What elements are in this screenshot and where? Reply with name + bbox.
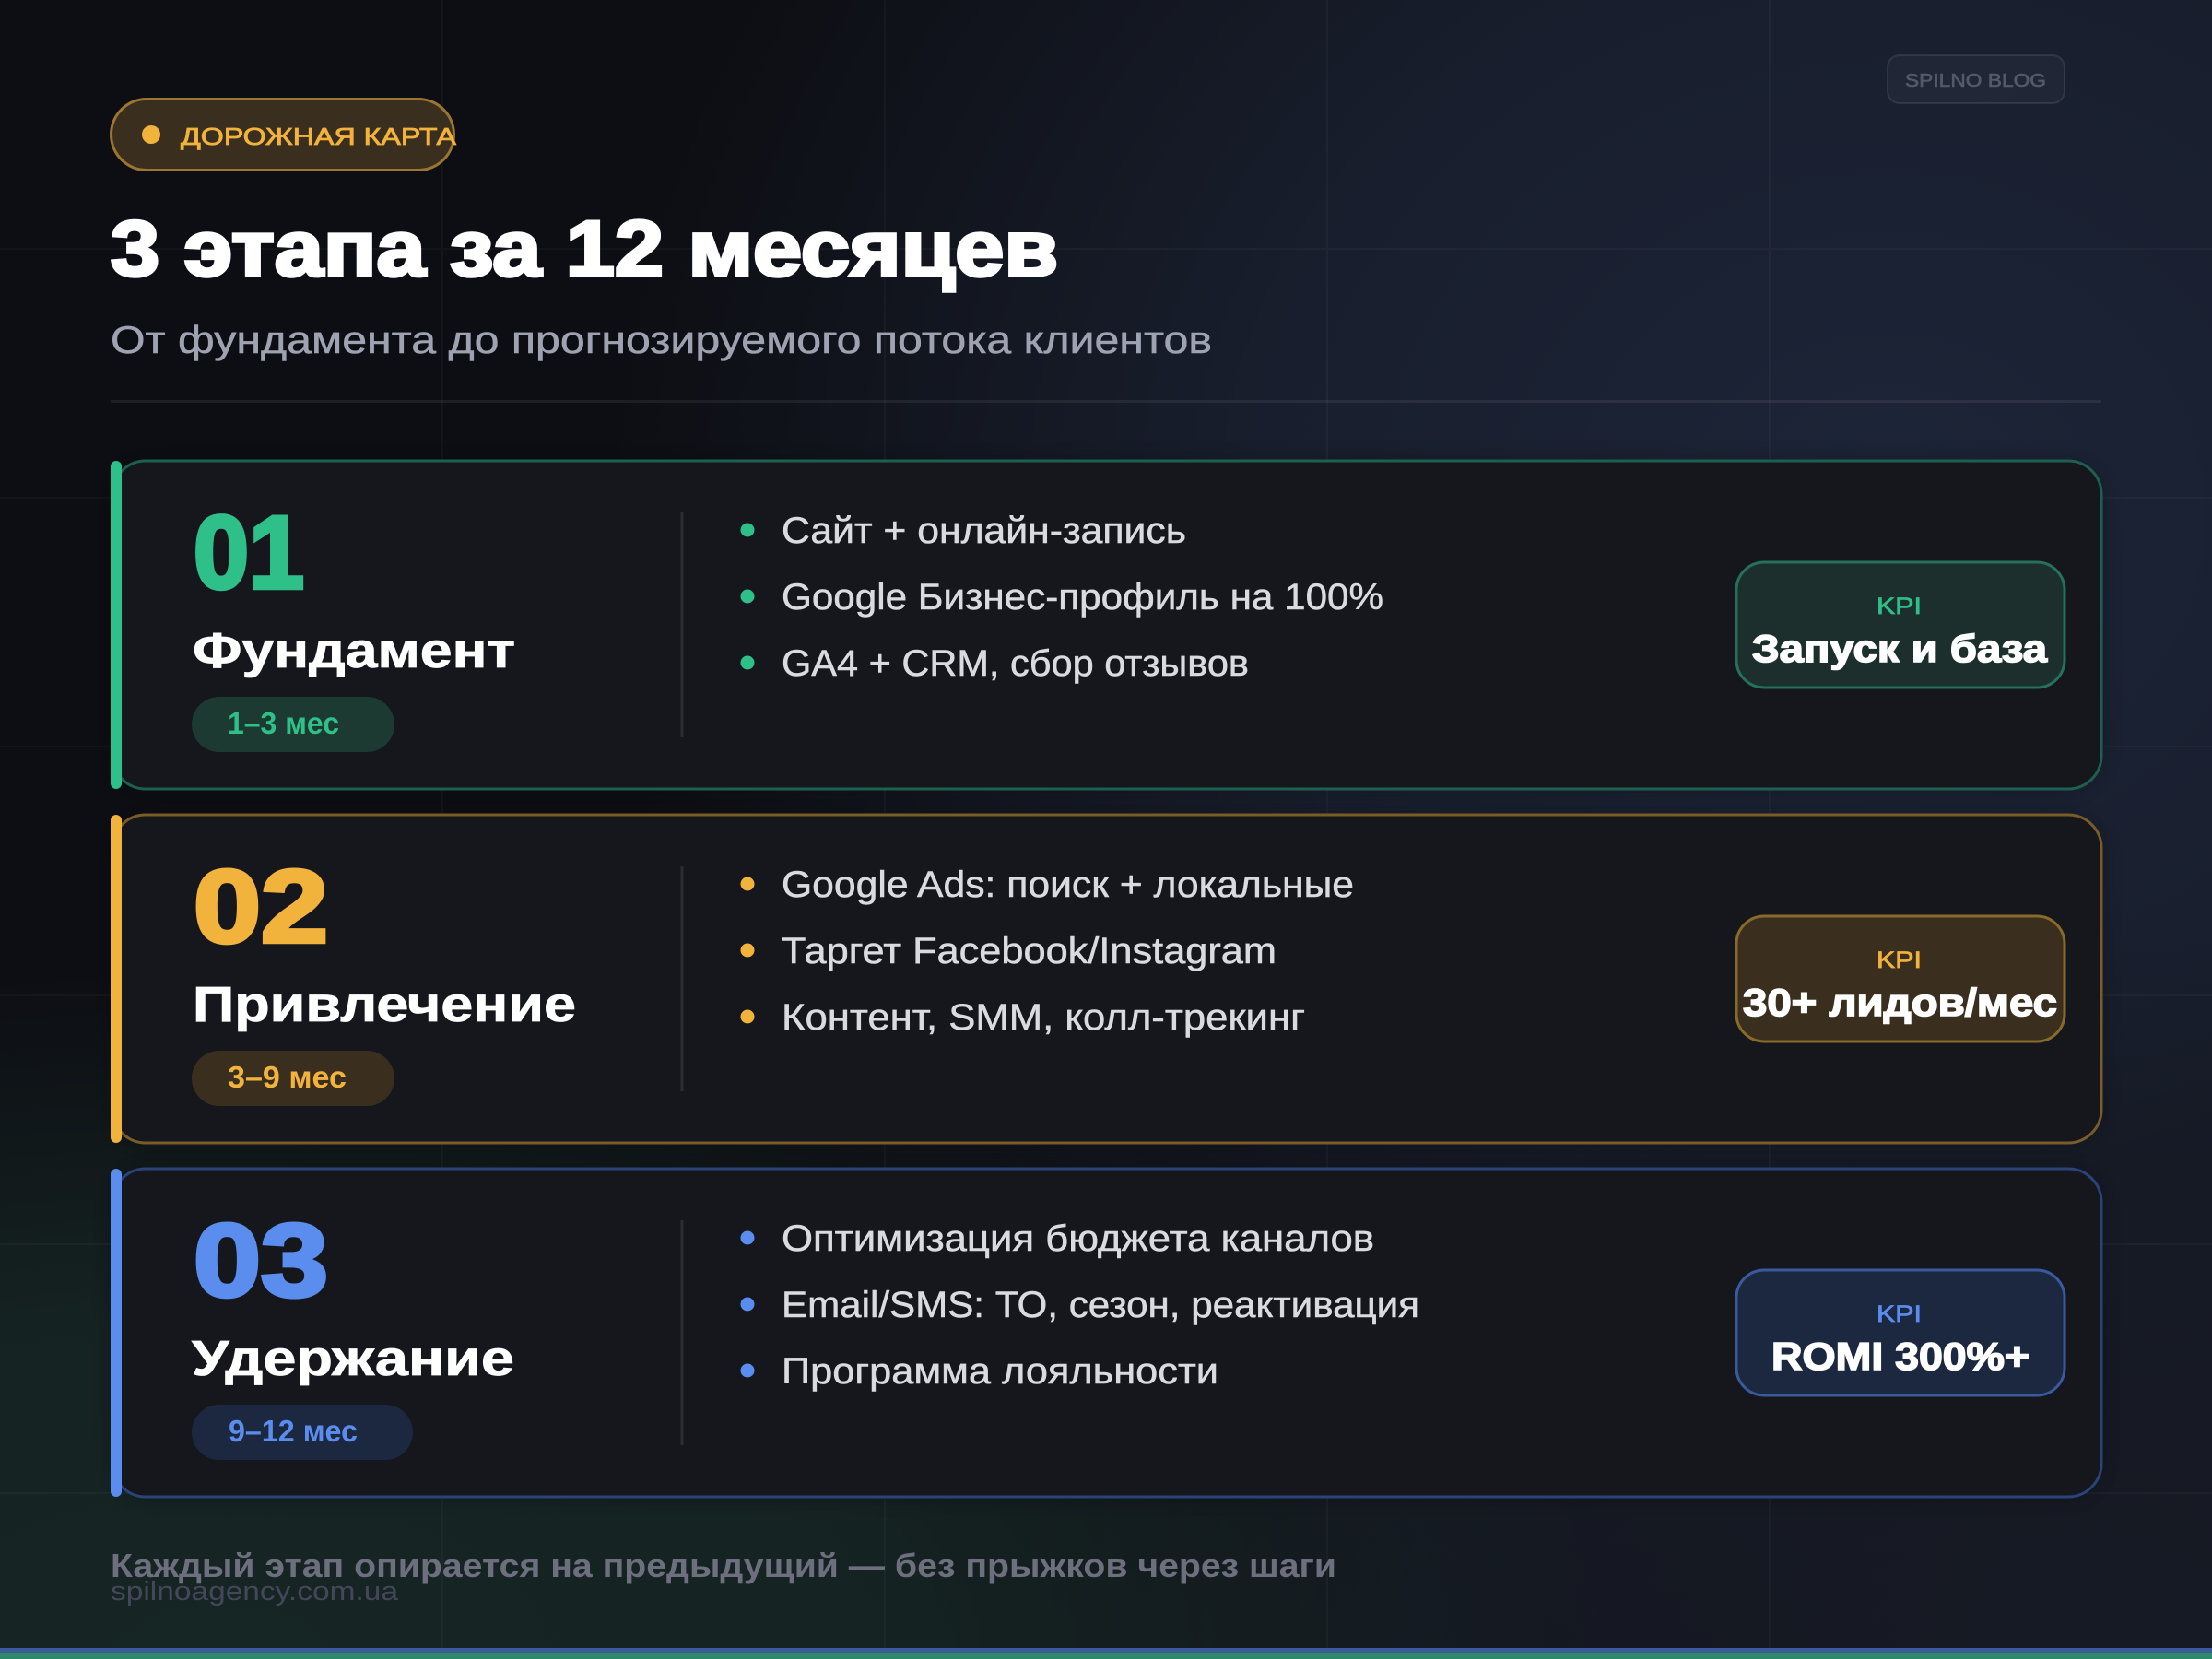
subtitle: От фундамента до прогнозируемого потока клиентов bbox=[111, 318, 1212, 361]
kpi box: ROMI 300%+ bbox=[1771, 1335, 2030, 1378]
task list: Сайт + онлайн-запись bbox=[782, 511, 1186, 551]
badge: дорожная карта: ДОРОЖНАЯ КАРТА bbox=[181, 123, 457, 150]
kpi box: KPI bbox=[1877, 594, 1922, 619]
duration tag bbox=[192, 697, 394, 752]
accent bar bbox=[111, 1169, 122, 1497]
panel: этап 01 фундамент bbox=[111, 461, 2101, 789]
kpi box: KPI bbox=[1877, 1301, 1922, 1327]
duration tag: 1–3 мес bbox=[228, 706, 339, 740]
duration tag: 3–9 мес bbox=[228, 1060, 347, 1094]
duration tag bbox=[192, 1405, 413, 1460]
tag: spilno blog: SPILNO BLOG bbox=[1905, 70, 2046, 91]
title: 3 этапа за 12 месяцев bbox=[111, 206, 1058, 293]
kpi box: KPI bbox=[1877, 947, 1922, 973]
kpi box: Запуск и база bbox=[1752, 627, 2048, 670]
panel: этап 03 удержание bbox=[111, 1169, 2101, 1497]
kpi box bbox=[1736, 916, 2065, 1041]
kpi box bbox=[1736, 1270, 2065, 1395]
kpi box: 30+ лидов/мес bbox=[1743, 981, 2057, 1024]
bottom color bar bbox=[0, 1648, 2212, 1659]
task list: Оптимизация бюджета каналов bbox=[782, 1218, 1374, 1259]
task list bbox=[741, 865, 1354, 1038]
duration tag bbox=[192, 1051, 394, 1106]
duration tag: 9–12 мес bbox=[229, 1414, 358, 1448]
step name: Фундамент bbox=[193, 623, 515, 678]
step number: 03 bbox=[194, 1203, 328, 1318]
task list: Контент, SMM, колл-трекинг bbox=[782, 997, 1305, 1038]
step name: Привлечение bbox=[193, 977, 576, 1032]
step number: 02 bbox=[194, 849, 328, 964]
footer url: spilnoagency.com.ua bbox=[111, 1577, 399, 1606]
footer note: Каждый этап опирается на предыдущий — без прыжков через шаги bbox=[111, 1547, 1336, 1584]
task list: GA4 + CRM, сбор отзывов bbox=[782, 643, 1249, 684]
task list: Программа лояльности bbox=[782, 1351, 1218, 1392]
accent bar bbox=[111, 815, 122, 1143]
panel: этап 02 привлечение bbox=[111, 815, 2101, 1143]
badge: дорожная карта bbox=[111, 100, 457, 170]
kpi box bbox=[1736, 562, 2065, 688]
task list: Google Ads: поиск + локальные bbox=[782, 865, 1354, 905]
task list: Email/SMS: ТО, сезон, реактивация bbox=[782, 1285, 1419, 1325]
task list: Таргет Facebook/Instagram bbox=[782, 931, 1277, 971]
step number: 01 bbox=[194, 495, 304, 610]
accent bar bbox=[111, 461, 122, 789]
task list: Google Бизнес-профиль на 100% bbox=[782, 577, 1383, 618]
step name: Удержание bbox=[192, 1331, 514, 1386]
tag: spilno blog bbox=[1888, 55, 2065, 103]
task list bbox=[741, 511, 1383, 684]
task list bbox=[741, 1218, 1419, 1392]
